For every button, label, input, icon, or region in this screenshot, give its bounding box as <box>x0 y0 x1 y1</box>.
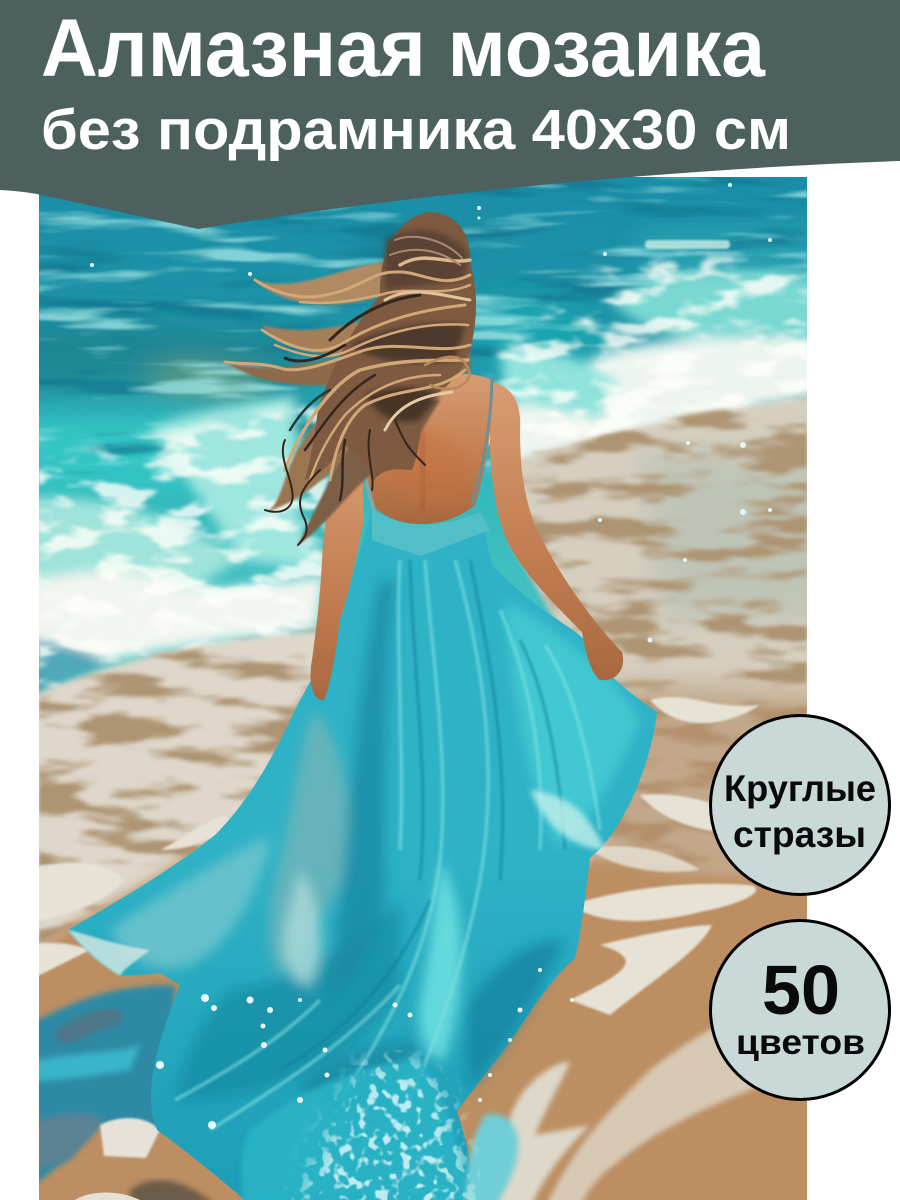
shoreline foam band <box>546 1026 758 1200</box>
splash at dress hem <box>156 968 574 1200</box>
dress bodice <box>372 508 490 556</box>
hair mass <box>305 212 476 482</box>
flowing turquoise dress <box>68 508 657 1200</box>
back <box>361 374 492 524</box>
badge: 50 colors: 50 <box>762 951 840 1029</box>
water sparkles <box>90 183 772 642</box>
badge: round rhinestones: Круглые <box>724 768 876 809</box>
light strands <box>225 237 470 480</box>
subtitle: без подрамника 40х30 см <box>41 98 791 162</box>
lower sand <box>0 840 850 1200</box>
woman's back and arms <box>310 374 623 700</box>
dark water and foam at lower left <box>39 980 214 1200</box>
hair wisps, filled <box>225 262 470 545</box>
badge: round rhinestones <box>710 716 890 894</box>
flowing hair <box>225 212 476 545</box>
dark strands <box>265 295 425 545</box>
badge: round rhinestones: стразы <box>733 814 866 855</box>
wet sand and shallow foam <box>0 390 850 1200</box>
tan tone on right before the dry sand <box>590 672 807 880</box>
sheer hem highlights <box>68 930 150 976</box>
badge: 50 colors: цветов <box>736 1023 865 1062</box>
sea water <box>39 177 807 696</box>
dress shading folds <box>110 580 640 1120</box>
left arm <box>310 480 364 700</box>
title: Алмазная мозаика <box>41 3 766 94</box>
header banner <box>0 0 900 229</box>
dress straps <box>472 378 492 505</box>
badge: 50 colors <box>710 920 890 1100</box>
right arm <box>490 382 623 680</box>
breaking wave foam <box>39 250 807 693</box>
